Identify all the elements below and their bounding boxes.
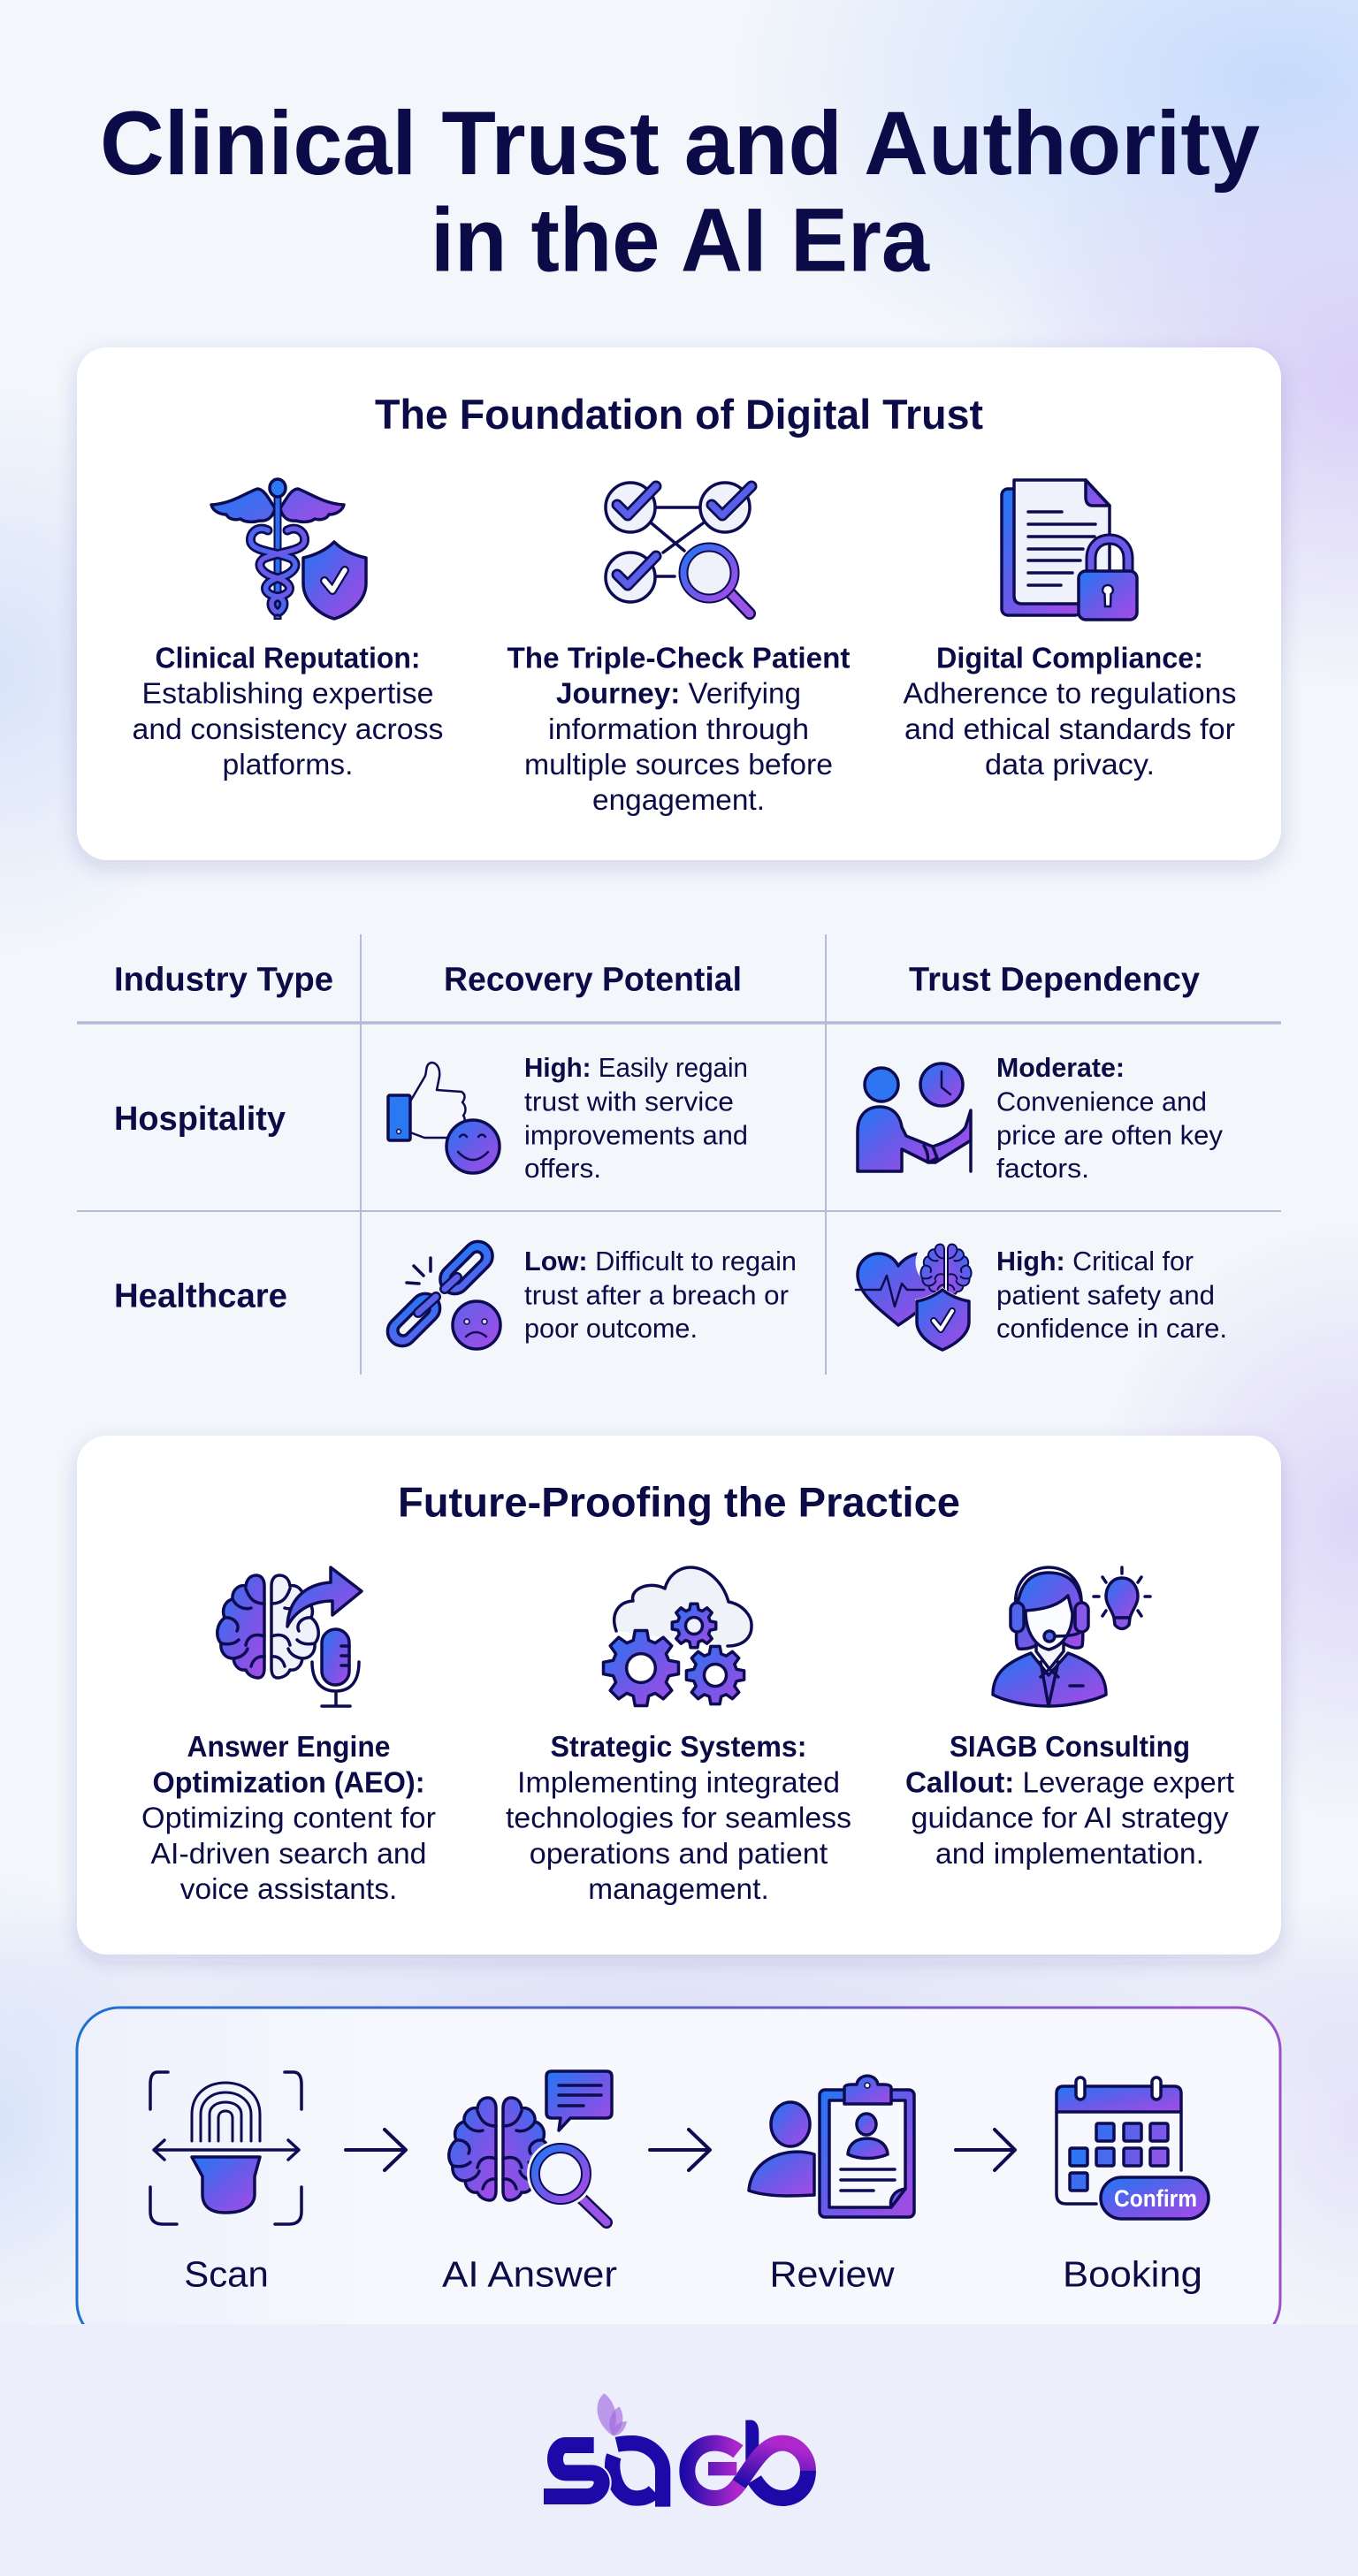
text: strategic systems: Implementing integrated [517,1766,840,1798]
text: healthcare recovery: poor outcome. [524,1313,698,1344]
text: consulting callout: SIAGB Consulting [950,1730,1190,1763]
icon: caduceus and shield [211,479,366,619]
text: hospitality recovery: improvements and [524,1119,748,1150]
comparison table [77,934,1281,1375]
button label: confirm: Confirm [1114,2185,1197,2212]
text: digital compliance: data privacy. [985,748,1155,781]
heading: foundation: The Foundation of Digital Trust [375,391,983,438]
icon: heart, brain and shield [856,1238,976,1353]
text: healthcare recovery: trust after a breach or [524,1280,789,1310]
logo mark: g and b loop [687,2443,808,2498]
text: digital compliance [904,642,1236,781]
text: triple-check patient journey: information through [548,713,809,745]
text: strategic systems: operations and patient [530,1837,828,1870]
text: consulting callout: guidance for AI strategy [911,1802,1229,1834]
text: healthcare recovery: Low: Difficult to regain [524,1246,797,1277]
label: ai answer: AI Answer [442,2254,617,2295]
text: clinical reputation: platforms. [223,748,354,781]
logo: siagb [544,2393,808,2507]
title: Clinical Trust and Authority [100,93,1260,194]
text: strategic systems [506,1730,851,1905]
label: scan: Scan [184,2254,269,2295]
icon: triple check and magnifier [606,483,751,614]
text: answer engine optimization: Optimizing content for [141,1802,436,1834]
row label: hospitality: Hospitality [114,1101,286,1138]
text: hospitality trust: price are often key [996,1119,1223,1150]
icon: brain, speech bubble and magnifier [449,2071,612,2222]
text: clinical reputation: Clinical Reputation: [156,642,421,674]
text: answer engine optimization: Answer Engine [187,1730,391,1763]
text: hospitality trust: Moderate: [996,1052,1125,1083]
label: review: Review [769,2254,895,2295]
text: healthcare trust [996,1246,1227,1344]
footer band [0,2324,1358,2576]
text: answer engine optimization: Optimization (AEO): [152,1766,424,1798]
text: clinical reputation: and consistency across [133,713,444,745]
text: triple-check patient journey: The Triple-Check Patient [507,642,851,674]
text: hospitality recovery: trust with service [524,1086,734,1117]
text: healthcare recovery [524,1246,797,1344]
label: booking: Booking [1063,2254,1202,2295]
icon: thumbs up and smiley [388,1063,500,1173]
text: strategic systems: management. [588,1872,769,1905]
text: consulting callout [905,1730,1234,1870]
icon: brain, arrow and microphone [217,1567,362,1706]
arrow: review to booking [956,2130,1015,2170]
text: answer engine optimization [141,1730,436,1905]
text: hospitality recovery: offers. [524,1153,601,1184]
icon: calendar with confirm [1057,2077,1209,2219]
text: triple-check patient journey: engagement. [592,783,765,816]
panel: the foundation of digital trust [77,347,1281,860]
text: triple-check patient journey: Journey: Verifying [556,677,801,710]
text: digital compliance: Digital Compliance: [936,642,1203,674]
icon: broken chain and sad face [382,1236,500,1352]
title: in the AI Era [431,189,930,290]
text: hospitality recovery: High: Easily regain [524,1052,748,1083]
icon: cloud and gears [604,1567,751,1705]
row label: healthcare: Healthcare [114,1278,287,1315]
text: clinical reputation [133,642,444,781]
icon: document and padlock [1002,480,1137,620]
arrow: answer to review [650,2130,710,2170]
text: hospitality trust [996,1052,1223,1184]
text: digital compliance: Adherence to regulations [904,677,1236,710]
icon: handshake and clock [858,1063,971,1171]
panel: future-proofing the practice [77,1436,1281,1955]
icon: patient record clipboard [749,2076,914,2217]
title [100,93,1260,290]
text: answer engine optimization: AI-driven search and [150,1837,426,1870]
text: healthcare trust: High: Critical for [996,1246,1194,1277]
text: healthcare trust: confidence in care. [996,1313,1227,1344]
text: consulting callout: and implementation. [935,1837,1204,1870]
table header row: Recovery Potential [444,962,742,999]
heading: future-proofing: Future-Proofing the Practice [398,1478,960,1526]
table header row: Trust Dependency [909,962,1200,999]
logo leaves [597,2393,627,2436]
text: clinical reputation: Establishing expertise [141,677,433,710]
text: healthcare trust: patient safety and [996,1280,1215,1310]
table header row: Industry Type [114,962,333,999]
text: triple-check patient journey [507,642,851,816]
text: hospitality trust: factors. [996,1153,1089,1184]
text: consulting callout: Callout: Leverage expert [905,1766,1234,1798]
table header row [114,962,1200,999]
arrow: scan to answer [346,2130,406,2170]
icon: consultant and lightbulb [993,1567,1150,1706]
icon: fingerprint scan [150,2072,301,2224]
text: strategic systems: Strategic Systems: [550,1730,806,1763]
text: answer engine optimization: voice assistants. [180,1872,397,1905]
text: hospitality recovery [524,1052,748,1184]
text: hospitality trust: Convenience and [996,1086,1207,1117]
text: digital compliance: and ethical standards for [904,713,1235,745]
text: triple-check patient journey: multiple sources before [524,748,833,781]
panel: patient journey flow [77,2008,1280,2344]
text: strategic systems: technologies for seamless [506,1802,851,1834]
